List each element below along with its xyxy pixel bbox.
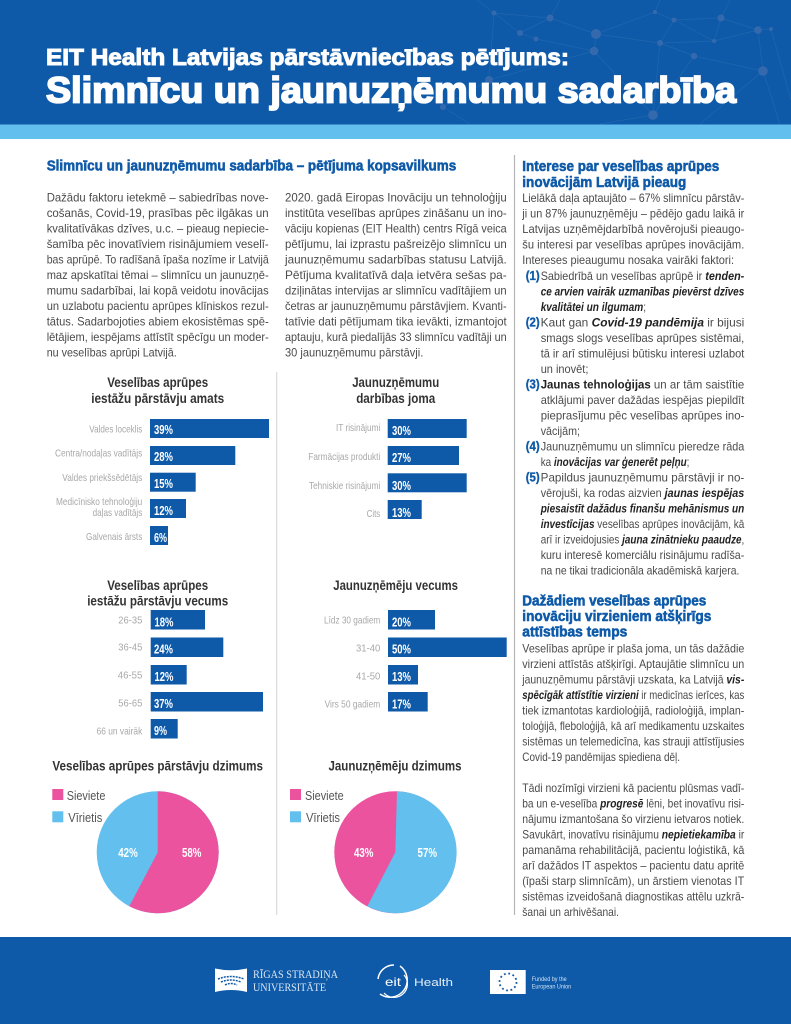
value labels: 57% bbox=[418, 846, 437, 860]
text block: development directions: virzieni attīstās atšķirīgi. Aptaujātie slimnīcu un bbox=[522, 658, 744, 671]
bar: 31-40 50% bbox=[356, 638, 507, 657]
value labels: 43% bbox=[354, 846, 373, 860]
chart title bbox=[352, 375, 439, 406]
chart title bbox=[91, 375, 224, 406]
text block: interest intro bbox=[521, 192, 744, 267]
bar: 31-40 50%: 31-40 bbox=[356, 642, 380, 654]
bar: Valdes loceklis 39% bbox=[89, 419, 269, 438]
heading: interest in healthcare innovation: Interese par veselības aprūpes bbox=[522, 159, 719, 175]
chart title bbox=[87, 578, 228, 608]
text block: interest intro: Intereses pieaugumu nosaka vairāki faktori: bbox=[522, 254, 734, 267]
logo: EIT Health: eit bbox=[385, 975, 402, 989]
text block: interest intro: Lielākā daļa aptaujāto – 67% slimnīcu pārstāv- bbox=[522, 192, 744, 205]
text block: slower directions: sistēmas izveidošanā diagnostikas attēlu uzkrā- bbox=[522, 890, 744, 904]
bar: Virs 50 gadiem 17%: 17% bbox=[392, 696, 411, 712]
pie slices bbox=[334, 791, 457, 913]
bar: 26-35 18%: 18% bbox=[154, 614, 174, 630]
title line 1: EIT Health Latvijas pārstāvniecības pētījums: bbox=[46, 44, 569, 70]
bar: 56-65 37%: 56-65 bbox=[118, 698, 142, 710]
bar: Tehniskie risinājumi 30%: Tehniskie risinājumi bbox=[309, 480, 380, 492]
bar: IT risinājumi 30% bbox=[336, 419, 467, 438]
list item 2: (2) bbox=[526, 314, 540, 330]
list item 5 bbox=[526, 470, 745, 578]
footer bbox=[0, 937, 791, 1024]
text block: intro right column: vāciju kopienas (EIT Health) centrs Rīgā veica bbox=[285, 222, 507, 236]
logo: European Union funding: European Union bbox=[532, 984, 571, 990]
bar: Galvenais ārsts 6%: Galvenais ārsts bbox=[86, 531, 142, 543]
list item 5: kuru interesē komerciālu risinājumu radīša- bbox=[541, 549, 744, 562]
text block: interest intro: ji un 87% jaunuzņēmēju – pēdējo gadu laikā ir bbox=[521, 208, 744, 220]
heading: interest in healthcare innovation bbox=[522, 159, 719, 191]
bar: 36-45 24%: 24% bbox=[154, 642, 173, 656]
bar: Medicīnisko tehnoloģiju daļas vadītājs 12% bbox=[56, 495, 186, 519]
list item 2: smags slogs veselības aprūpes sistēmai, bbox=[541, 332, 744, 345]
bar: Līdz 30 gadiem 20% bbox=[324, 610, 435, 630]
value labels: 58% bbox=[182, 846, 201, 860]
list item 1 bbox=[526, 268, 745, 314]
bar: 46-55 12%: 46-55 bbox=[118, 670, 142, 682]
text block: development directions: jaunuzņēmumu pārstāvji uzskata, ka Latvijā vis- bbox=[521, 674, 744, 686]
text block: intro right column: 2020. gadā Eiropas Inovāciju un tehnoloģiju bbox=[285, 192, 507, 204]
bar: 41-50 13% bbox=[356, 665, 418, 684]
bar: Līdz 30 gadiem 20%: 20% bbox=[392, 614, 411, 630]
bar: 46-55 12%: 12% bbox=[154, 669, 174, 684]
list item 5: arī ir izveidojusies jauna zinātnieku paaudze, bbox=[541, 534, 744, 546]
text block: intro left column: kvalitatīvākas dzīves, u.c. – pieaug nepiecie- bbox=[47, 222, 269, 236]
text block: intro left column: mumu sadarbībai, lai kopā veidotu inovācijas bbox=[47, 284, 269, 298]
bar: Cits 13%: 13% bbox=[392, 505, 411, 520]
list item 5: vērojuši, ka rodas aizvien jaunas iespējas bbox=[541, 487, 745, 500]
logo: Rīga Stradiņš University: UNIVERSITĀTE bbox=[253, 980, 326, 994]
bar: Farmācijas produkti 27%: 27% bbox=[392, 450, 411, 465]
chart title: Veselības aprūpes bbox=[107, 578, 208, 593]
text block: intro left column: cošanās, Covid-19, prasības pēc ilgākas un bbox=[47, 207, 269, 220]
bar: Centra/nodaļas vadītājs 28%: 28% bbox=[154, 449, 173, 464]
chart title: Veselības aprūpes pārstāvju dzimums bbox=[52, 758, 263, 774]
list item 1: Sabiedrībā un veselības aprūpē ir tenden- bbox=[541, 270, 744, 283]
bar: Centra/nodaļas vadītājs 28% bbox=[55, 446, 235, 465]
chart title: Jaunuzņēmēju dzimums bbox=[328, 758, 462, 774]
text block: development directions bbox=[521, 642, 744, 764]
bar: Valdes priekšsēdētājs 15%: Valdes priekšsēdētājs bbox=[62, 472, 142, 484]
bar: 26-35 18%: 26-35 bbox=[118, 614, 142, 626]
text block: slower directions: (īpaši starp slimnīcām), un ārstiem vienotas IT bbox=[522, 875, 744, 888]
logo: European Union funding: Funded by the bbox=[532, 977, 567, 983]
bar chart: age of startups bbox=[324, 578, 507, 712]
list item 5: (5) bbox=[526, 470, 540, 484]
text block: intro left column: maz apskatītai tēmai – slimnīcu un jaunuzņē- bbox=[47, 269, 269, 282]
bar: IT risinājumi 30%: 30% bbox=[392, 423, 411, 438]
bar: Farmācijas produkti 27% bbox=[308, 446, 459, 465]
text block: intro right column: aptauju, kurā piedalījās 33 slimnīcu vadītāji un bbox=[285, 331, 507, 344]
bar: Medicīnisko tehnoloģiju daļas vadītājs 12%: 12% bbox=[154, 503, 173, 518]
text block: intro right column: jaunuzņēmumu sadarbības statusu Latvijā. bbox=[284, 254, 507, 266]
text block: development directions: spēcīgāk attīstītie virzieni ir medicīnas ierīces, kas bbox=[522, 689, 744, 702]
list item 2 bbox=[526, 314, 745, 376]
bar: 46-55 12% bbox=[118, 665, 187, 684]
list item 5: na ne tikai tradicionāla akadēmiskā karjera. bbox=[541, 564, 739, 578]
text block: intro right column: pētījumu, lai izprastu pašreizējo slimnīcu un bbox=[285, 238, 507, 251]
text block: intro right column: četras ar jaunuzņēmumu pārstāvjiem. Kvanti- bbox=[285, 300, 507, 313]
list item 3: atklājumi paver dažādas iespējas piepildīt bbox=[541, 394, 745, 407]
text block: slower directions: nājumu izmantošana šo virzienu ietvaros notiek. bbox=[522, 813, 744, 826]
bar: IT risinājumi 30%: IT risinājumi bbox=[336, 422, 380, 434]
legend: Vīrietis bbox=[306, 811, 340, 825]
text block: interest intro: Latvijas uzņēmējdarbībā novērojuši pieaugo- bbox=[522, 223, 744, 236]
legend: Vīrietis bbox=[68, 811, 102, 825]
bar: 41-50 13%: 41-50 bbox=[356, 670, 380, 682]
heading: different development pace bbox=[522, 594, 711, 640]
text block: intro right column: institūta veselības aprūpes zināšanu un ino- bbox=[285, 207, 507, 220]
bar: Valdes loceklis 39%: 39% bbox=[154, 422, 173, 437]
bar: 36-45 24%: 36-45 bbox=[118, 642, 142, 654]
chart title: Jaunuzņēmēju vecums bbox=[333, 578, 458, 593]
text block: intro right column: Pētījuma kvalitatīvā daļa ietvēra sešas pa- bbox=[285, 269, 507, 282]
bar: Virs 50 gadiem 17%: Virs 50 gadiem bbox=[325, 698, 380, 710]
value labels: 42% bbox=[118, 846, 138, 860]
chart title: Veselības aprūpes bbox=[107, 375, 208, 390]
chart title: darbības joma bbox=[356, 391, 436, 406]
list item 5: Papildus jaunuzņēmumu pārstāvji ir no- bbox=[541, 472, 744, 484]
list item 2: Kaut gan Covid-19 pandēmija ir bijusi bbox=[541, 316, 744, 330]
list item 3 bbox=[526, 376, 745, 438]
bar: Cits 13%: Cits bbox=[367, 508, 380, 520]
legend: Sieviete bbox=[305, 789, 344, 803]
legend bbox=[290, 789, 344, 825]
bar chart: position of healthcare representatives bbox=[55, 375, 269, 545]
text block: development directions: tiek izmantotas kardioloģijā, radioloģijā, implan- bbox=[522, 704, 744, 718]
list item 1: (1) bbox=[526, 268, 540, 283]
text block: development directions: sistēmas un telemedicīna, kas strauji attīstījusies bbox=[522, 736, 744, 748]
legend bbox=[52, 789, 105, 825]
network pattern bbox=[440, 0, 791, 124]
list item 5: investīcijas veselības aprūpes inovācijām, kā bbox=[541, 518, 745, 531]
list item 5: piesaistīt dažādus finanšu mehānismus un bbox=[540, 502, 744, 516]
bar: 56-65 37%: 37% bbox=[154, 696, 173, 711]
list item 1: ce arvien vairāk uzmanības pievērst dzīves bbox=[541, 286, 745, 298]
text block: intro left column: šamība pēc inovatīviem risinājumiem veselī- bbox=[47, 238, 269, 251]
bar: Centra/nodaļas vadītājs 28%: Centra/nodaļas vadītājs bbox=[55, 448, 142, 460]
value labels bbox=[118, 846, 201, 860]
bar: 36-45 24% bbox=[118, 638, 223, 657]
heading: interest in healthcare innovation: inovācijām Latvijā pieaug bbox=[522, 175, 686, 191]
bar: Medicīnisko tehnoloģiju daļas vadītājs 12%: daļas vadītājs bbox=[93, 507, 142, 519]
bar chart: startup field of activity bbox=[308, 375, 467, 520]
logo: Rīga Stradiņš University bbox=[215, 967, 338, 994]
pie chart: healthcare representatives gender bbox=[52, 758, 263, 913]
title line 2: Slimnīcu un jaunuzņēmumu sadarbība bbox=[46, 70, 737, 110]
text block: intro right column: dziļinātas intervijas ar slimnīcu vadītājiem un bbox=[285, 284, 507, 298]
bar: 56-65 37% bbox=[118, 692, 263, 712]
bar: Valdes priekšsēdētājs 15%: 15% bbox=[154, 476, 173, 491]
list item 2: un inovēt; bbox=[541, 363, 588, 376]
text block: development directions: toloģijā, fleboloģijā, kā arī medikamentu uzskaites bbox=[522, 720, 744, 733]
text block: slower directions: Tādi nozīmīgi virzieni kā pacientu plūsmas vadī- bbox=[522, 782, 744, 795]
text block: intro left column: nu veselības aprūpi Latvijā. bbox=[47, 346, 177, 360]
legend: Sieviete bbox=[67, 789, 105, 803]
list item 4: (4) bbox=[526, 438, 540, 454]
chart title: Jaunuzņēmumu bbox=[352, 375, 439, 390]
bar: Medicīnisko tehnoloģiju daļas vadītājs 12%: Medicīnisko tehnoloģiju bbox=[56, 495, 142, 508]
value labels bbox=[354, 846, 437, 860]
bar: Valdes priekšsēdētājs 15% bbox=[62, 472, 196, 492]
text block: slower directions: šanai un arhivēšanai. bbox=[522, 906, 619, 919]
text block: intro left column: bas aprūpē. To radīšanā īpaša nozīme ir Latvijā bbox=[47, 254, 269, 266]
list item 3: Jaunas tehnoloģijas un ar tām saistītie bbox=[541, 378, 744, 392]
bar: Cits 13% bbox=[367, 500, 422, 520]
bar: Galvenais ārsts 6% bbox=[86, 526, 168, 545]
list item 4: Jaunuzņēmumu un slimnīcu pieredze rāda bbox=[541, 440, 745, 454]
text block: intro left column: Dažādu faktoru ietekmē – sabiedrības nove- bbox=[47, 192, 269, 204]
list item 4: ka inovācijas var ģenerēt peļņu; bbox=[541, 456, 689, 469]
list item 3: vācijām; bbox=[541, 425, 580, 438]
bar: Valdes loceklis 39%: Valdes loceklis bbox=[89, 424, 142, 436]
text block: intro left column: un uzlabotu pacientu aprūpes klīniskos rezul- bbox=[47, 300, 269, 313]
heading: different development pace: inovāciju virzieniem atšķirīgs bbox=[522, 609, 711, 625]
text block: intro left column: lētājiem, iespējams attīstīt spēcīgu un moder- bbox=[47, 331, 269, 344]
heading: different development pace: attīstības temps bbox=[522, 624, 627, 640]
logo: European Union funding bbox=[490, 970, 571, 994]
logo: EIT Health bbox=[378, 965, 453, 997]
bar: Galvenais ārsts 6%: 6% bbox=[154, 530, 167, 545]
section heading: summary: Slimnīcu un jaunuzņēmumu sadarbība – pētījuma kopsavilkums bbox=[47, 158, 456, 174]
bar: 66 un vairāk 9% bbox=[97, 719, 178, 738]
bar: 31-40 50%: 50% bbox=[392, 642, 411, 656]
list item 2: tā ir arī stimulējusi būtisku interesi uzlabot bbox=[541, 348, 745, 360]
bar: 26-35 18% bbox=[118, 610, 205, 630]
bar: 66 un vairāk 9%: 9% bbox=[154, 723, 167, 738]
logo: Rīga Stradiņš University: RĪGAS STRADIŅA bbox=[253, 967, 338, 981]
bar: Farmācijas produkti 27%: Farmācijas produkti bbox=[308, 451, 380, 463]
text block: intro right column: tatīvie dati pētījumam tika ievākti, izmantojot bbox=[285, 316, 507, 328]
logo: EIT Health: Health bbox=[414, 977, 453, 989]
list item 4 bbox=[526, 438, 745, 469]
text block: slower directions bbox=[522, 782, 745, 919]
text block: intro left column bbox=[47, 192, 269, 360]
pie slices bbox=[97, 791, 219, 913]
bar: Tehniskie risinājumi 30% bbox=[309, 473, 467, 493]
text block: interest intro: šu interesi par veselības aprūpes inovācijām. bbox=[522, 238, 744, 252]
text block: intro right column bbox=[284, 192, 507, 360]
chart title: iestāžu pārstāvju amats bbox=[91, 391, 224, 406]
text block: slower directions: pamanāma rehabilitācijā, pacientu loģistikā, kā bbox=[522, 844, 745, 857]
bar: Līdz 30 gadiem 20%: Līdz 30 gadiem bbox=[324, 614, 380, 626]
text block: slower directions: Savukārt, inovatīvu risinājumu nepietiekamība ir bbox=[522, 828, 744, 842]
bar chart: age of healthcare representatives bbox=[87, 578, 263, 738]
bar: 66 un vairāk 9%: 66 un vairāk bbox=[97, 726, 143, 738]
text block: intro right column: 30 jaunuzņēmumu pārstāvji. bbox=[285, 346, 423, 360]
bar: 41-50 13%: 13% bbox=[392, 669, 411, 684]
text block: slower directions: arī dažādos IT aspektos – pacientu datu apritē bbox=[522, 860, 744, 872]
chart title: iestāžu pārstāvju vecums bbox=[87, 594, 228, 608]
text block: intro left column: tātus. Sadarbojoties abiem ekosistēmas spē- bbox=[47, 316, 269, 328]
pie chart: startup gender bbox=[290, 758, 462, 913]
bar: Tehniskie risinājumi 30%: 30% bbox=[392, 478, 411, 493]
list item 3: (3) bbox=[526, 376, 540, 392]
text block: slower directions: ba un e-veselība progresē lēni, bet inovatīvu risi- bbox=[522, 798, 744, 810]
text block: development directions: Covid-19 pandēmijas spiediena dēļ. bbox=[522, 751, 680, 764]
list item 3: pieprasījumu pēc veselības aprūpes ino- bbox=[541, 410, 744, 422]
list item 1: kvalitātei un ilgumam; bbox=[541, 301, 646, 314]
bar: Virs 50 gadiem 17% bbox=[325, 692, 428, 712]
text block: development directions: Veselības aprūpe ir plaša joma, un tās dažādie bbox=[522, 642, 744, 656]
header banner bbox=[0, 0, 791, 139]
heading: different development pace: Dažādiem veselības aprūpes bbox=[522, 594, 706, 610]
